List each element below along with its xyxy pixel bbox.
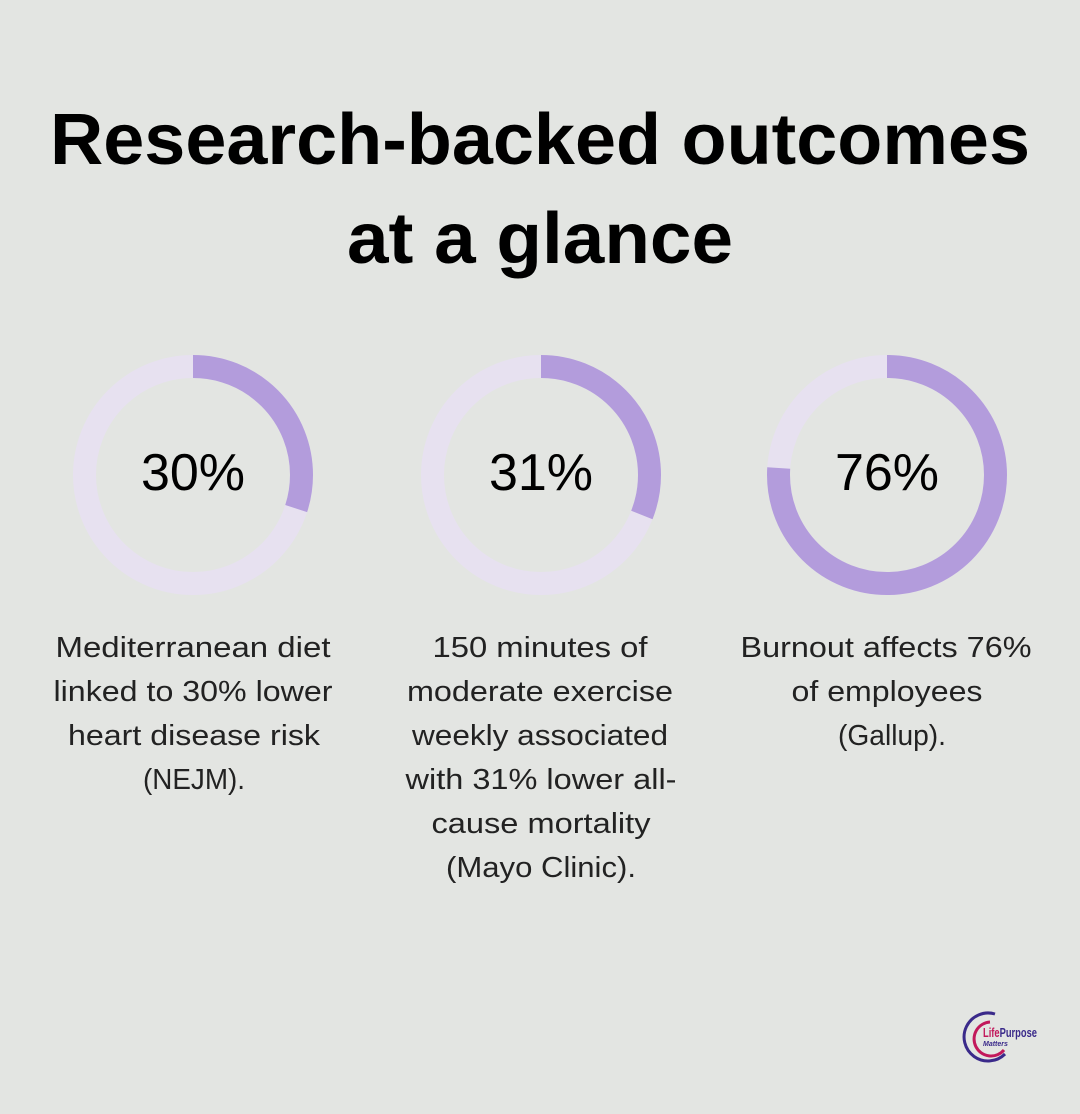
text block: exercise bbox=[404, 632, 676, 884]
text block: diet: (NEJM). bbox=[143, 764, 245, 796]
text block: burnout: Burnout affects 76% bbox=[740, 632, 1032, 664]
logo: LifePurpose Matters: Matters bbox=[983, 1041, 1008, 1048]
panel: 30% diet bbox=[54, 366, 333, 796]
title bbox=[50, 100, 1030, 279]
text block: diet bbox=[54, 632, 333, 796]
panel: 31% exercise bbox=[404, 366, 676, 884]
text block: diet: linked to 30% lower bbox=[54, 676, 333, 708]
donut chart: 31% bbox=[432, 366, 650, 584]
text block: exercise: cause mortality bbox=[432, 808, 651, 840]
donut chart: 31%: 31% bbox=[489, 444, 593, 502]
text block: exercise: moderate exercise bbox=[407, 676, 673, 708]
donut chart: 30% bbox=[84, 366, 302, 584]
text block: burnout: (Gallup). bbox=[838, 720, 946, 752]
text block: burnout: of employees bbox=[792, 676, 982, 708]
logo: LifePurpose Matters bbox=[964, 1013, 1037, 1061]
panel: 76% burnout bbox=[740, 366, 1032, 752]
text block: diet: heart disease risk bbox=[68, 720, 321, 752]
donut chart: 30%: 30% bbox=[141, 444, 245, 502]
text block: exercise: with 31% lower all- bbox=[404, 764, 676, 796]
title: Research-backed outcomes bbox=[50, 100, 1030, 180]
donut chart: 76% bbox=[778, 366, 996, 584]
logo: LifePurpose Matters: LifePurpose bbox=[983, 1025, 1037, 1040]
text block: diet: Mediterranean diet bbox=[56, 632, 330, 664]
text block: exercise: (Mayo Clinic). bbox=[446, 852, 636, 884]
donut chart: 76%: 76% bbox=[835, 444, 939, 502]
title: at a glance bbox=[347, 199, 733, 279]
text block: exercise: 150 minutes of bbox=[432, 632, 649, 664]
text block: exercise: weekly associated bbox=[411, 720, 668, 752]
text block: burnout bbox=[740, 632, 1032, 752]
